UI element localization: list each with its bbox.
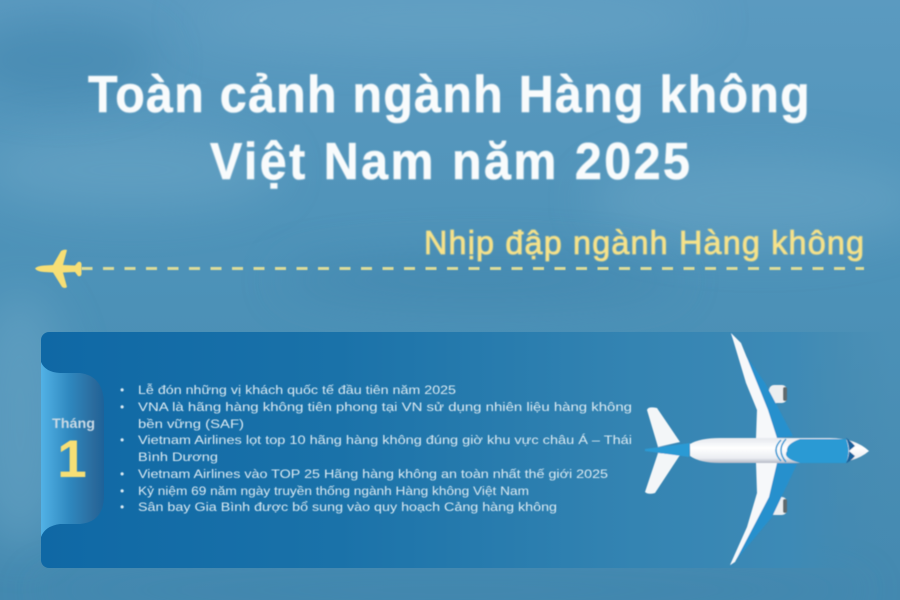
news list: VNA là hãng hàng không tiên phong tại VN sử dụng nhiên liệu hàng không xyxy=(138,400,632,414)
panel: month 1 xyxy=(41,332,891,568)
news list: Sân bay Gia Bình được bổ sung vào quy hoạch Cảng hàng không xyxy=(138,500,557,514)
bullets: • xyxy=(120,383,124,397)
panel background xyxy=(41,332,891,568)
subtitle: Nhịp đập ngành Hàng không xyxy=(424,224,864,261)
month label: Tháng xyxy=(52,415,95,431)
news list: Kỷ niệm 69 năm ngày truyền thống ngành Hàng không Việt Nam xyxy=(138,484,529,498)
engines xyxy=(769,385,787,403)
tailplane xyxy=(647,407,680,447)
nose livery xyxy=(786,439,848,463)
title xyxy=(88,65,810,190)
news list: Vietnam Airlines lọt top 10 hãng hàng không đúng giờ khu vực châu Á – Thái xyxy=(138,432,632,447)
wings xyxy=(730,333,793,438)
flight path dashed line xyxy=(82,267,864,270)
news list: Vietnam Airlines vào TOP 25 Hãng hàng không an toàn nhất thế giới 2025 xyxy=(138,467,608,481)
bullets: • xyxy=(120,433,124,447)
tail cone xyxy=(645,443,690,457)
month tab xyxy=(41,362,104,537)
title: Việt Nam năm 2025 xyxy=(210,132,690,190)
news list: Lễ đón những vị khách quốc tế đầu tiên năm 2025 xyxy=(138,382,456,397)
news list xyxy=(120,382,632,514)
fuselage stripes xyxy=(776,440,781,461)
news list: bền vững (SAF) xyxy=(138,417,244,431)
news list: Bình Dương xyxy=(138,450,218,464)
icon: airliner xyxy=(645,333,869,567)
month number: 1 xyxy=(57,430,87,489)
bullets: • xyxy=(120,400,124,414)
bullets: • xyxy=(120,484,124,498)
fuselage xyxy=(690,438,869,463)
bullets: • xyxy=(120,467,124,481)
bullets: • xyxy=(120,500,124,514)
cockpit crescent xyxy=(846,438,855,463)
icon: yellow plane xyxy=(35,250,82,288)
bullets xyxy=(120,383,124,514)
title: Toàn cảnh ngành Hàng không xyxy=(88,65,810,123)
